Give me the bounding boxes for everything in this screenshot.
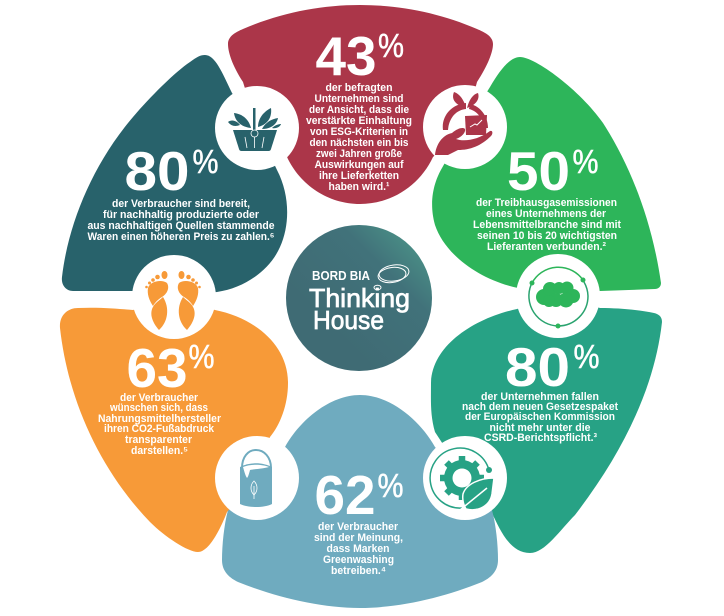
description: eines Unternehmens der <box>486 208 607 220</box>
description: der Treibhausgasemissionen <box>476 197 617 209</box>
dark teal petal <box>62 55 287 297</box>
description: Unternehmen sind <box>314 93 404 105</box>
description: ihren CO2-Fußabdruck <box>104 423 215 435</box>
description: der Verbraucher <box>120 392 199 404</box>
description: aus nachhaltigen Quellen stammende <box>88 220 274 232</box>
blue petal <box>222 395 498 608</box>
percent sign: % <box>188 338 214 375</box>
description: der Ansicht, dass die <box>309 104 409 116</box>
orange petal <box>60 297 288 552</box>
description: ihre Lieferketten <box>319 170 399 182</box>
description: nicht mehr unter die <box>490 422 590 434</box>
description <box>462 391 618 444</box>
description: betreiben.⁴ <box>331 565 386 577</box>
description: der Europäischen Kommission <box>465 411 615 423</box>
description <box>88 198 274 243</box>
description: Nahrungsmittelhersteller <box>98 413 222 425</box>
description: seinen 10 bis 20 wichtigsten <box>477 230 617 242</box>
logo text: House: House <box>313 305 384 335</box>
description: von ESG-Kriterien in <box>310 126 408 138</box>
icon: gear with leaf <box>423 436 507 520</box>
stat: 43%: 43 <box>316 25 376 87</box>
description: Waren einen höheren Preis zu zahlen.⁶ <box>88 231 274 243</box>
description: der Verbraucher <box>318 521 399 533</box>
description: Auswirkungen auf <box>314 159 404 171</box>
description: Lebensmittelbranche sind mit <box>473 219 621 231</box>
description: verstärkte Einhaltung <box>306 115 412 127</box>
panel: 43 percent <box>228 5 493 204</box>
icon: hand holding plant and globe <box>423 85 507 169</box>
description: Greenwashing <box>323 554 394 566</box>
icon: footprints with leaves <box>132 255 216 339</box>
description: CSRD-Berichtspflicht.³ <box>484 432 597 444</box>
description: haben wird.¹ <box>328 181 390 193</box>
logo text: Thinking: Thinking <box>309 283 410 313</box>
description <box>98 392 222 457</box>
stat: 80%: 80 <box>124 140 190 202</box>
panel: 80 percent consumers <box>62 55 287 297</box>
panel: 62 percent <box>222 395 498 608</box>
red petal <box>228 5 493 204</box>
description: darstellen.⁵ <box>131 445 188 457</box>
description: der Verbraucher sind bereit, <box>112 198 250 210</box>
sea green petal <box>431 295 662 553</box>
description: transparenter <box>125 434 193 446</box>
description: wünschen sich, dass <box>109 402 208 414</box>
panel: 80 percent companies <box>431 295 662 553</box>
logo text: Bord Bia: BORD BIA <box>312 268 371 283</box>
description: Lieferanten verbunden.² <box>487 241 606 253</box>
percent sign: % <box>378 27 404 64</box>
center logo: Bord Bia Thinking House <box>286 225 432 371</box>
stat: 50%: 50 <box>507 140 570 202</box>
icon: paint bucket with leaf <box>215 436 299 520</box>
description: zwei Jahren große <box>316 148 402 160</box>
description <box>306 82 412 193</box>
green petal <box>432 57 661 295</box>
description: der Unternehmen fallen <box>481 391 599 403</box>
description: der befragten <box>326 82 393 94</box>
percent sign: % <box>378 467 404 504</box>
percent sign: % <box>572 143 598 180</box>
percent sign: % <box>574 338 600 375</box>
icon: shopping basket with leaves <box>215 86 299 170</box>
description: dass Marken <box>326 543 390 555</box>
description: den nächsten ein bis <box>310 137 408 149</box>
description <box>314 521 403 577</box>
description: sind der Meinung, <box>314 532 403 544</box>
icon: cloud in cycle <box>516 254 600 338</box>
stat: 63%: 63 <box>126 337 188 399</box>
logo thought bubble <box>374 263 410 290</box>
description: für nachhaltig produzierte oder <box>103 209 260 221</box>
percent sign: % <box>192 143 218 180</box>
stat: 62%: 62 <box>314 464 376 526</box>
description <box>473 197 621 253</box>
description: nach dem neuen Gesetzespaket <box>462 401 618 413</box>
stat: 80%: 80 <box>505 336 570 398</box>
panel: 50 percent <box>432 57 661 295</box>
panel: 63 percent <box>60 297 288 552</box>
